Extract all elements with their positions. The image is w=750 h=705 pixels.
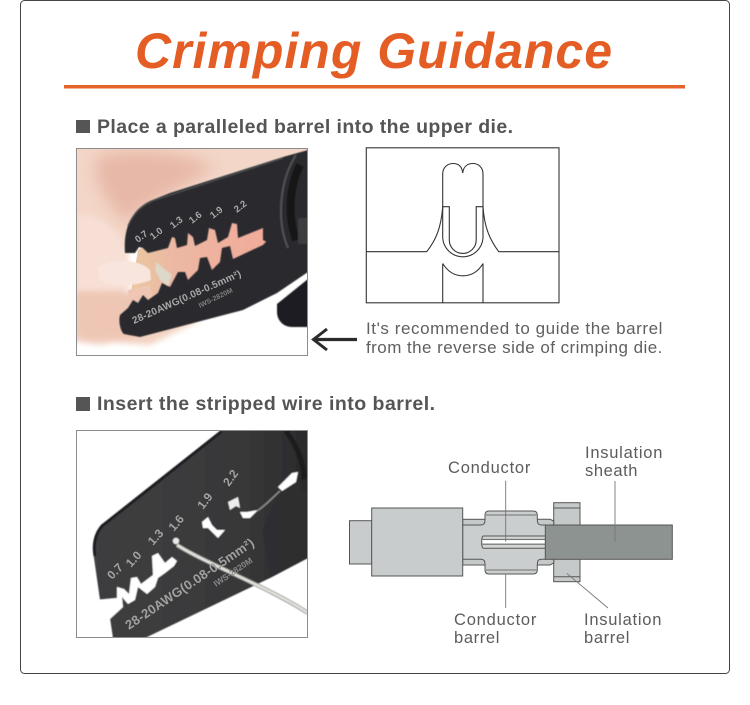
recommendation note: It's recommended to guide the barrel — [366, 319, 663, 338]
label: conductor barrel: Conductor — [454, 611, 537, 629]
photo: stripped wire inserted into barrel: 1.3 — [145, 526, 167, 548]
recommendation note: from the reverse side of crimping die. — [366, 338, 663, 357]
lower jaw — [119, 232, 308, 337]
die slot 1.9 — [202, 517, 225, 538]
label: insulation barrel — [584, 611, 662, 647]
connector diagram — [350, 503, 672, 582]
insulation barrel tabs — [554, 503, 580, 582]
front body — [350, 521, 372, 564]
photo: fingers placing barrel into crimper die: 28-20AWG(0.08-0.5mm²) — [131, 269, 243, 327]
recommendation note — [366, 319, 663, 357]
title rule — [64, 85, 685, 88]
photo: fingers placing barrel into crimper die: 0.7 — [133, 229, 150, 245]
grip behind — [277, 279, 308, 327]
photo frame — [76, 148, 308, 356]
photo frame — [76, 430, 308, 638]
photo: stripped wire inserted into barrel: IWS-2820M — [212, 555, 254, 589]
jaw gap with skin behind — [131, 222, 266, 297]
title: Crimping Guidance — [135, 23, 612, 79]
conductor strands — [482, 536, 546, 548]
label: insulation barrel: barrel — [584, 629, 630, 647]
label: insulation sheath: sheath — [585, 462, 638, 480]
label: conductor barrel — [454, 611, 537, 647]
photo: stripped wire inserted into barrel: 0.7 — [104, 560, 126, 582]
fingernail — [128, 262, 152, 286]
insulation sheath — [545, 525, 672, 559]
label: insulation sheath: Insulation — [585, 444, 663, 462]
wire — [177, 545, 308, 613]
leader lines — [506, 481, 615, 608]
photo: stripped wire inserted into barrel: 1.9 — [194, 490, 216, 512]
photo: stripped wire inserted into barrel — [76, 430, 308, 638]
die diagram — [366, 148, 559, 303]
conductor barrel — [463, 511, 546, 574]
photo: stripped wire inserted into barrel: 28-20AWG(0.08-0.5mm²) — [122, 535, 257, 632]
step 2 heading: Insert the stripped wire into barrel. — [97, 393, 436, 415]
upper jaw — [125, 150, 308, 253]
photo: stripped wire inserted into barrel: 1.6 — [166, 512, 187, 534]
photo: fingers placing barrel into crimper die — [77, 149, 307, 348]
photo: fingers placing barrel into crimper die: 1.3 — [168, 215, 185, 231]
photo: fingers placing barrel into crimper die: IWS-2820M — [198, 287, 234, 310]
label: insulation sheath — [585, 444, 663, 480]
label: conductor barrel: barrel — [454, 629, 500, 647]
die slot 2.2 — [228, 497, 240, 510]
crimped barrel tip — [155, 262, 172, 286]
necks — [463, 519, 486, 565]
step 1 heading: Place a paralleled barrel into the upper die. — [97, 116, 514, 138]
photo: fingers placing barrel into crimper die: 1.9 — [208, 205, 225, 221]
label: conductor: Conductor — [448, 459, 531, 477]
photo: stripped wire inserted into barrel: 2.2 — [220, 467, 241, 489]
photo: stripped wire inserted into barrel: 1.0 — [123, 548, 145, 570]
photo: fingers placing barrel into crimper die: 2.2 — [232, 199, 249, 215]
photo: fingers placing barrel into crimper die: 1.6 — [187, 210, 204, 226]
die slots 0.7 to 1.3 — [96, 553, 177, 619]
label: insulation barrel: Insulation — [584, 611, 662, 629]
photo: fingers placing barrel into crimper die: 1.0 — [148, 226, 165, 242]
arrow pointing to photo — [314, 329, 357, 350]
